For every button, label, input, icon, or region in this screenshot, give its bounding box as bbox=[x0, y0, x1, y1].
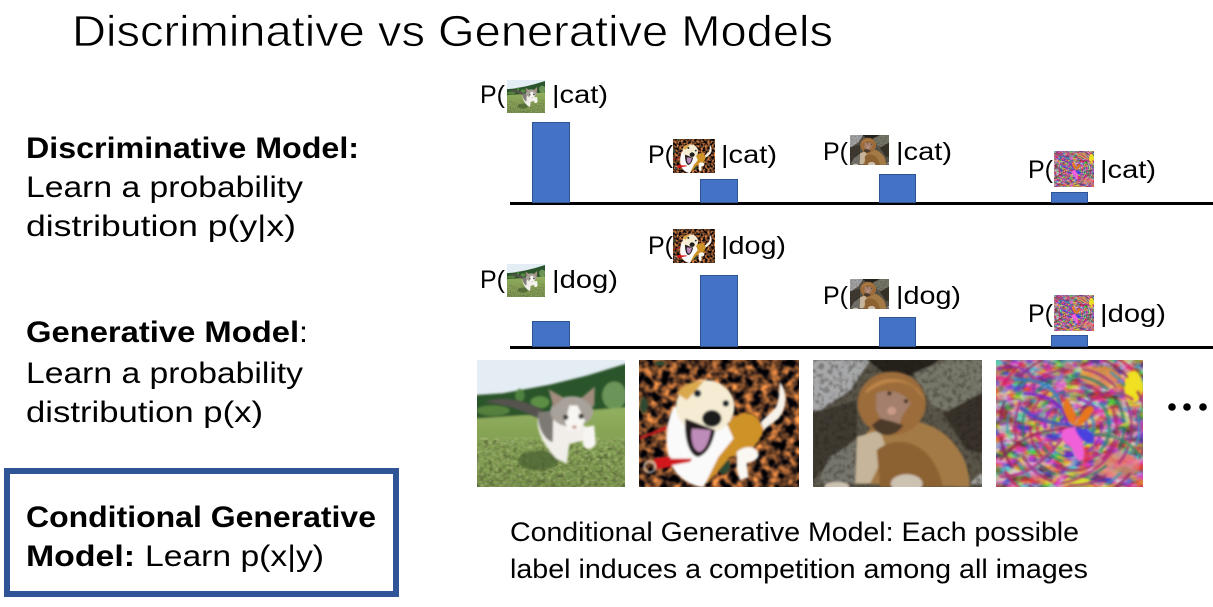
bar: dog given cat bbox=[700, 180, 738, 202]
text block: generative model: Learn a probability bbox=[26, 357, 303, 390]
text block: generative model: Generative Model : bbox=[26, 316, 308, 349]
label: cat given dog bbox=[480, 262, 618, 300]
image: kitten on grass bbox=[470, 351, 637, 500]
bar: noise given cat bbox=[1052, 192, 1088, 202]
bar: monkey given dog bbox=[880, 318, 916, 346]
text block: generative model: distribution p(x) bbox=[26, 396, 263, 429]
bar: cat given dog bbox=[532, 322, 570, 346]
label: monkey given cat bbox=[823, 134, 952, 166]
caption: conditional generative model: Conditional Generative Model: Each possible bbox=[510, 517, 1079, 547]
panel: conditional generative model: Model: bbox=[26, 540, 135, 573]
text block: discriminative model: Discriminative Model: bbox=[26, 132, 359, 165]
text block: generative model bbox=[26, 316, 308, 429]
label: monkey given dog: |dog) bbox=[896, 282, 961, 310]
caption: conditional generative model bbox=[510, 517, 1088, 584]
label: dog given dog: P( bbox=[648, 232, 674, 260]
bar: cat given cat bbox=[532, 122, 570, 202]
bar chart: p(image | cat) bbox=[480, 78, 1213, 205]
title: Discriminative vs Generative Models bbox=[72, 7, 833, 56]
label: dog given dog bbox=[648, 228, 786, 264]
label: cat given dog: P( bbox=[480, 266, 506, 294]
label: noise given cat: P( bbox=[1028, 156, 1054, 184]
label: monkey given cat: |cat) bbox=[896, 138, 952, 166]
text block: discriminative model: distribution p(y|x) bbox=[26, 210, 296, 243]
label: cat given cat: |cat) bbox=[552, 81, 608, 109]
label: monkey given cat: P( bbox=[823, 138, 849, 166]
label: dog given cat: P( bbox=[648, 141, 674, 169]
label: cat given dog: |dog) bbox=[552, 266, 618, 294]
label: noise given cat bbox=[1028, 147, 1156, 193]
label: cat given cat: P( bbox=[480, 81, 506, 109]
bar: dog given dog bbox=[700, 276, 738, 346]
label: noise given cat: |cat) bbox=[1100, 156, 1156, 184]
bar chart: p(image | dog) bbox=[480, 228, 1213, 349]
text block: discriminative model bbox=[26, 132, 359, 243]
panel: conditional generative model: Conditional Generative bbox=[26, 501, 376, 534]
label: dog given dog: |dog) bbox=[721, 232, 786, 260]
label: monkey given dog bbox=[823, 278, 961, 310]
bar: monkey given cat bbox=[880, 174, 916, 202]
label: monkey given dog: P( bbox=[823, 282, 849, 310]
label: dog given cat: |cat) bbox=[721, 141, 777, 169]
label: noise given dog bbox=[1028, 291, 1166, 337]
image: colourful abstract swirl bbox=[992, 345, 1155, 509]
label: noise given dog: |dog) bbox=[1100, 300, 1166, 328]
caption: conditional generative model: label induces a competition among all images bbox=[510, 554, 1088, 584]
bar: noise given dog bbox=[1052, 336, 1088, 346]
label: noise given dog: P( bbox=[1028, 300, 1054, 328]
text block: discriminative model: Learn a probability bbox=[26, 171, 303, 204]
panel: conditional generative model: Learn p(x|y) bbox=[145, 540, 324, 573]
image: dog on autumn leaves bbox=[637, 357, 803, 490]
panel: conditional generative model bbox=[7, 471, 396, 594]
ellipsis dots bbox=[1168, 403, 1207, 411]
image: monkey on rocks bbox=[810, 357, 986, 493]
label: cat given cat bbox=[480, 78, 608, 116]
label: dog given cat bbox=[648, 138, 777, 174]
